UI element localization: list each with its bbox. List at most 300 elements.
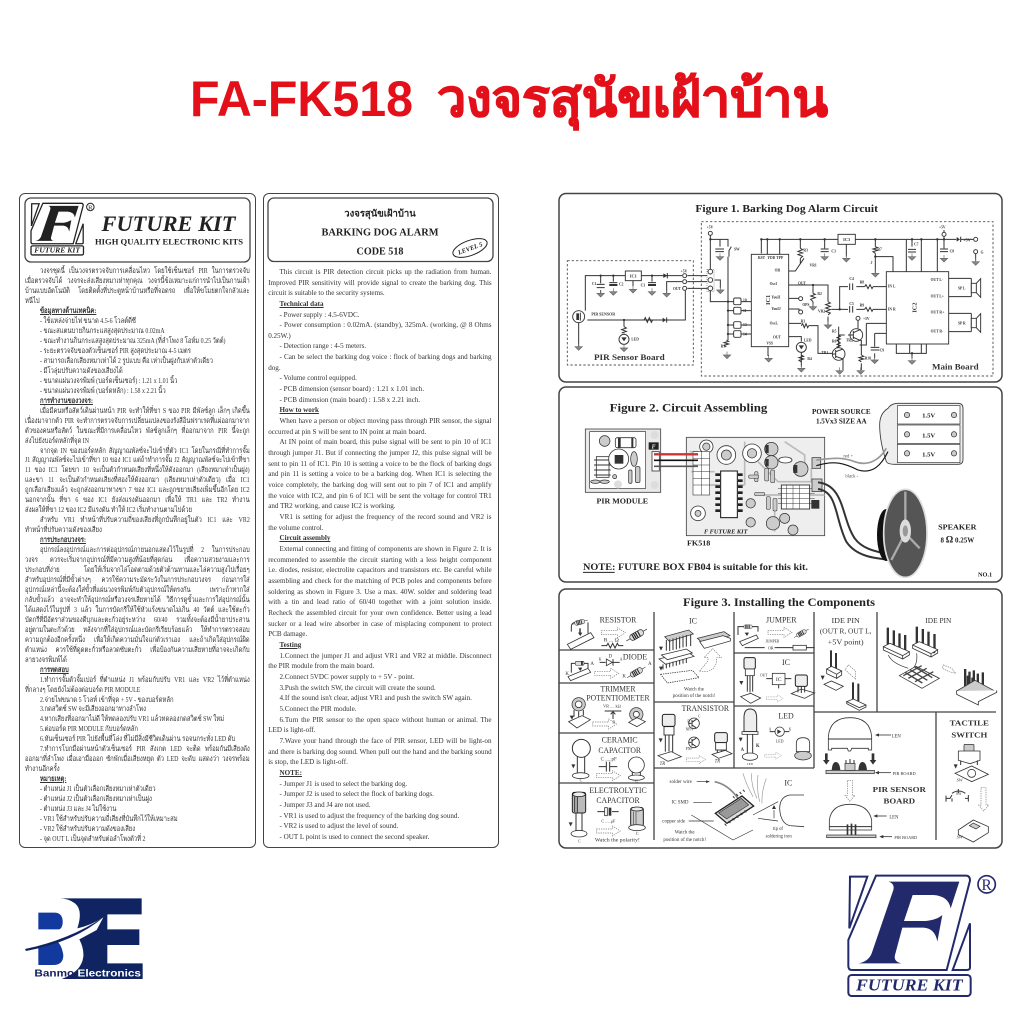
- panel: Thai instructions: ส่งผลให้ที่ขา 12 ของ IC2 มีแรงดัน ทำให้ IC2 เริ่มทำงานตามไปด้วย: [24, 505, 192, 514]
- PIR sensor board schematic: C2: [619, 283, 624, 287]
- main board schematic: R10: [865, 356, 871, 360]
- cell: PIR sensor board: BOARD: [883, 797, 916, 806]
- cell: LED: A: [769, 727, 772, 731]
- main board schematic: 14: [743, 332, 747, 336]
- panel: Thai instructions: อุปกรณ์เหล่านี้จะต้องใส่ขั้วที่แผ่นวงจรพิมพ์กับตัวอุปกรณ์ให้ตรงกัน เพราะถ้าหากใส่: [24, 585, 249, 594]
- cell: IDE PIN small: (OUT R, OUT L,: [820, 627, 872, 636]
- PIR sensor board schematic: C1: [592, 282, 597, 286]
- main board schematic: 10: [743, 299, 747, 303]
- panel: Thai instructions: ตำแหน่ง ควรใช้ที่ดูดตะกั่วหรือลวดซับตะกั่ว เพื่อป้องกันความเสียหายที่อาจจะเกิดกับ: [24, 645, 249, 654]
- heading: Figure 2: Figure 2. Circuit Assembling: [610, 401, 767, 415]
- main board schematic: C3: [831, 250, 836, 254]
- level badge: [451, 235, 489, 261]
- panel: English instructions: - Jumper J2 is used to select the flock of barking dogs.: [280, 790, 434, 798]
- cell: diode: A: [648, 662, 652, 667]
- panel: English instructions: - OUT L point is used to connect the second speaker.: [280, 833, 429, 841]
- cell: electrolytic capacitor: C: [578, 838, 581, 843]
- panel: Thai instructions: และขา 11 จะเป็นตัวกำหนดเสียงที่สองให้ดังออกมา (เสียงหมาเห่าตัวเดียว) เมื่อ IC1: [24, 475, 249, 484]
- main board schematic: R3: [801, 319, 805, 323]
- main board schematic: OUT L+: [931, 294, 944, 298]
- cell: IC SMD soldering: [662, 773, 804, 843]
- main board schematic: R5: [832, 330, 837, 334]
- panel: Thai instructions: - ระยะตรวจจับของตัวเซ็นเซอร์ PIR สูงสุดประมาณ 4-5 เมตร: [40, 346, 190, 355]
- cell: resistor: [567, 615, 649, 649]
- cell: transistor: TR: [660, 762, 665, 767]
- panel: English instructions: 1.Connect the jumper J1 and adjust VR1 and VR2 at middle. Disconnect: [280, 652, 492, 660]
- cell: LED: [739, 709, 811, 766]
- panel: English instructions: - Power supply : 4.5-6VDC.: [280, 310, 360, 318]
- PIR module board: [585, 429, 661, 492]
- main board schematic: OUT R-: [931, 330, 944, 334]
- cell: ceramic capacitor: C .....pF: [601, 758, 617, 763]
- cell: IDE PIN small: [820, 616, 872, 710]
- panel: Thai instructions: ได้แสดงไว้ในรูปที่ 3 แล้ว ในการบัดกรีให้ใช้หัวแร้งขนาดไม่เกิน 40 วัตต์ และใช้ตะกั่ว: [24, 605, 249, 614]
- main board schematic: J: [871, 261, 873, 265]
- cell: PIR sensor board: [823, 718, 927, 840]
- panel: Thai instructions: - สามารถเลือกเสียงหมาเห่าได้ 2 รูปแบบ คือ เห่าเป็นฝูงกับเห่าตัวเดียว: [40, 356, 212, 365]
- panel: English instructions: External connecting and fitting of components are shown in Figure 2. It is: [280, 545, 492, 553]
- panel: Thai instructions: การประกอบวงจร:: [40, 535, 85, 544]
- text block: English description: [268, 268, 492, 841]
- panel: English instructions: and TR2 working, and cause IC2 is working.: [268, 502, 396, 510]
- cell: electrolytic capacitor: ELECTROLYTIC: [589, 786, 647, 795]
- cell: IC regulator: IC: [776, 677, 782, 683]
- cell: ceramic capacitor: CERAMIC: [602, 736, 638, 745]
- cell: IC regulator: OUT: [760, 673, 768, 677]
- panel: Thai instructions: อยู่ตามในตะกั่วด้วย หลังจากที่ใส่อุปกรณ์และบัดกรีเรียบร้อยแล้ว ให้ทำการตรวจสอบ: [24, 625, 249, 634]
- panel: Thai instructions: 6.หันเซ็นเซอร์ PIR ไปยังพื้นที่โล่ง ที่ไม่มีสิ่งมีชีวิตเดินผ่าน รอจนกระทั่ง LED ดับ: [40, 734, 235, 743]
- cell: ceramic capacitor: C: [635, 778, 638, 783]
- panel: English instructions: PCB damage.: [268, 630, 307, 638]
- title: วงจรสุนัขเฝ้าบ้าน: [437, 70, 828, 131]
- logo mark: F letter: [858, 882, 959, 963]
- cell: IC regulator: [739, 658, 815, 703]
- speaker: [877, 489, 927, 577]
- registered mark: [978, 876, 995, 894]
- logo text: FUTURE KIT: [855, 976, 964, 995]
- main board schematic: G: [981, 250, 984, 254]
- main board schematic: VSS: [766, 341, 773, 345]
- cell: ceramic capacitor: C: [580, 778, 583, 783]
- battery holder: 1.5V: [922, 452, 935, 459]
- panel: Thai instructions: - ขนาดแผ่นวงจรพิมพ์ (บอร์ดเซ็นเซอร์) : 1.21 x 1.01 นิ้ว: [40, 376, 177, 385]
- cell: diode: A: [620, 656, 623, 661]
- cell: electrolytic capacitor: C .....μF: [601, 818, 616, 823]
- panel: English instructions: occurred at pin S will be sent to IN point at main board.: [268, 428, 426, 436]
- panel: English instructions: - PCB dimension (sensor board) : 1.21 x 1.01 inch.: [280, 385, 424, 393]
- main board schematic: OPS: [802, 303, 809, 307]
- panel: Thai instructions: ประกอบที่ง่าย โดยให้เริ่มจากไล่โอดตามด้วยตัวต้านทานและไล่ความสูงไปเรื่อยๆ: [24, 565, 249, 574]
- cell: transistor: B: [687, 719, 690, 723]
- cell: diode: D: [609, 655, 613, 660]
- panel: Thai instructions: - VR2 ใช้สำหรับปรับความดังของเสียง: [40, 824, 135, 833]
- cell: electrolytic capacitor: C: [636, 831, 639, 836]
- panel: Thai instructions: - ตำแหน่ง J2 เป็นตัวเลือกเสียงหมาเห่าเป็นฝูง: [40, 794, 151, 803]
- panel: English instructions: through jumper J1. But if connecting the jumper J2, this pulse signal will be: [268, 449, 492, 457]
- battery holder: 1.5V: [922, 413, 935, 420]
- cell: IC SMD soldering: solder wire: [670, 780, 693, 785]
- panel: Thai instructions: 7.ทำการโบกมือผ่านหน้าตัวเซ็นเซอร์ PIR สังเกต LED จะติด พร้อมกันมีเสียงดัง: [40, 744, 249, 753]
- main board schematic: R7: [877, 248, 882, 252]
- cell: trimmer potentiometer: VR .... kΩ: [603, 704, 621, 709]
- panel: Thai instructions: วงจรชุดนี้ เป็นวงจรตรวจจับการเคลื่อนไหว โดยใช้เซ็นเซอร์ PIR ในการตรวจจับ: [40, 266, 249, 275]
- main board schematic: +5V: [963, 238, 972, 243]
- cell: IC SMD soldering: soldering iron: [766, 834, 792, 839]
- cell: IDE PIN small: +5V point): [828, 637, 864, 646]
- cell: jumper: JUMPER: [766, 615, 797, 624]
- label: power source: 1.5Vx3 SIZE AA: [816, 417, 867, 425]
- main board schematic: C4: [849, 277, 854, 281]
- panel: Thai instructions: สำหรับ VR1 ทำหน้าที่ปรับความถี่ของเสียงที่ถูกบันทึกอยู่ในตัว IC1 และ VR2: [40, 515, 249, 524]
- cell: LED: LED: [776, 738, 784, 743]
- panel: Thai instructions: ความถูกต้องอีกครั้งหนึ่ง เพื่อให้เกิดความมั่นใจแก่ตัวเราเอง และถ้าเกิดใส่อุปกรณ์ผิด: [24, 635, 249, 644]
- cell: IC SMD soldering: copper side: [662, 819, 686, 824]
- main PCB: [686, 437, 825, 536]
- main board schematic: 13: [743, 323, 747, 327]
- panel: English instructions: 7.Wave your hand through the face of PIR sensor, LED will be light-on: [280, 737, 492, 745]
- panel: English instructions: - Power consumption : 0.02mA. (standby), 325mA. (working, @ 8 Ohms: [280, 321, 492, 329]
- cell: tactile switch: SW: [956, 792, 962, 796]
- panel: English instructions: Improved PIR sensitivity will provide signal to create the barking dog. This: [268, 278, 492, 286]
- logo mark: swoosh: [25, 917, 103, 951]
- panel: Figure 2: [559, 387, 1002, 582]
- panel: Thai instructions: - ขณะทำงานกินกระแสสูงสุดประมาณ 325mA (ที่ลำโพง 8 โอห์ม 0.25 วัตต์): [40, 336, 225, 345]
- main board schematic: LED: [804, 339, 812, 343]
- PIR sensor board schematic: [567, 261, 707, 365]
- main board schematic: IC2: [911, 302, 918, 313]
- main board schematic: RST: [758, 256, 766, 260]
- cell: IC SMD soldering: IC: [784, 779, 792, 788]
- panel: English instructions: VR1 is setting for adjust the frequency of the record sound and VR2 is: [280, 513, 492, 521]
- panel: Thai instructions: 3.กดสวิตช์ SW จะมีเสียงออกมาทางลำโพง: [40, 704, 145, 713]
- cell: IDE PIN small: IDE PIN: [831, 616, 861, 625]
- cell: LED: LED: [747, 762, 754, 766]
- panel: English instructions: - VR2 is used to adjust the level of sound.: [280, 822, 398, 830]
- panel: Thai instructions: - ขนาดแผ่นวงจรพิมพ์ (บอร์ดหลัก) : 1.58 x 2.21 นิ้ว: [40, 386, 165, 395]
- cell: transistor: TR: [715, 759, 720, 764]
- cell: electrolytic capacitor: Watch the polarity!: [595, 838, 640, 844]
- cell: transistor: NPN: [686, 727, 693, 731]
- main board schematic: OUT L-: [931, 278, 944, 282]
- level badge: LEVEL 5: [456, 241, 484, 257]
- cell: ceramic capacitor: CAPACITOR: [598, 746, 642, 755]
- label: speaker: SPEAKER: [938, 523, 978, 531]
- cell: IC: [659, 616, 730, 699]
- label: FK518: FK518: [687, 540, 711, 548]
- wires: battery: [816, 448, 888, 480]
- panel: English instructions: Testing: [280, 641, 301, 649]
- panel: Thai instructions: [19, 193, 256, 848]
- icon: small Future Kit logo: [31, 203, 94, 255]
- panel: English instructions: soldering as shown in Figure 3. Use a max. 40W. solder and soldering lead: [268, 588, 492, 596]
- panel: Thai instructions: อุปกรณ์ลงอุปกรณ์และการต่ออุปกรณ์ภายนอกแสดงไว้ในรูปที่ 2 ในการประกอบ: [40, 545, 249, 554]
- panel: English instructions: 5.Connect the PIR module.: [280, 705, 357, 713]
- cell: LED: K: [756, 744, 760, 749]
- main board schematic: C5: [849, 302, 854, 306]
- logo mark: E letter: [60, 898, 143, 979]
- cell: IC SMD soldering: tip of: [773, 827, 783, 832]
- panel: English instructions: LED is light-off.: [268, 726, 316, 734]
- panel: English instructions: - Jumper J3 and J4 are not used.: [280, 801, 371, 809]
- cell: electrolytic capacitor: CAPACITOR: [596, 796, 640, 805]
- title: FA-FK518: [190, 71, 413, 127]
- cell: resistor: RESISTOR: [600, 615, 637, 624]
- panel: Thai instructions: เมื่อมีคนหรือสัตว์เดินผ่านหน้า PIR จะทำให้ที่ขา S ของ PIR มีพัลซ์ลูก เล็กๆ เกิดขึ้น: [40, 406, 249, 415]
- main board schematic: +5V: [863, 317, 870, 321]
- panel: Thai instructions: 4.หากเสียงที่ออกมาไม่ดี ให้ทดลองปรับ VR1 แล้วทดลองกดสวิตช์ SW ใหม่: [40, 714, 224, 723]
- wires: PIR to main: [654, 454, 698, 466]
- main board schematic: SW: [734, 248, 740, 252]
- main board schematic: C7: [914, 242, 919, 246]
- cell: transistor: TRANSISTOR: [682, 704, 730, 713]
- panel: English instructions: the voice with IC2, and pin 6 of IC1 will be sent the voltage for control TR1: [268, 492, 492, 500]
- main board schematic: C9: [880, 348, 884, 352]
- icon: small Future Kit logo: FUTURE KIT: [34, 247, 81, 255]
- product code: CODE 518: [356, 246, 404, 258]
- wires: battery: red +: [843, 455, 853, 460]
- main board schematic: +5V: [707, 226, 714, 230]
- panel: English instructions: dog.: [268, 364, 281, 372]
- label: Main Board: Main Board: [932, 362, 979, 371]
- product name: BARKING DOG ALARM: [322, 228, 439, 238]
- label: NO.1: NO.1: [978, 571, 992, 578]
- panel: Figure 1: [559, 194, 1002, 382]
- cell: PIR sensor board: PIR BOARD: [894, 835, 917, 840]
- main board schematic: R9: [860, 304, 864, 308]
- main board schematic: R2: [817, 292, 822, 296]
- panel: Thai instructions: - จุด OUT L เป็นจุดสำหรับต่อลำโพงตัวที่ 2: [40, 834, 145, 843]
- panel: English instructions: and pin 11 is setting a voice to be a barking dog. When IC1 is selecting the: [268, 470, 492, 478]
- panel: Thai instructions: - ขณะสแตนบายกินกระแสสูงสุดประมาณ 0.02mA: [40, 326, 164, 335]
- main board schematic: SP L: [958, 286, 966, 290]
- cell: IDE PIN large: [883, 616, 997, 705]
- panel: English instructions: 3.Push the switch SW, the circuit will create the sound.: [280, 684, 436, 692]
- logo mark: B letter: [38, 913, 63, 965]
- cell: jumper: JUMPER: [765, 639, 780, 643]
- panel: English instructions: When have a person or object moving pass through PIR sensor, the signal: [280, 417, 492, 425]
- thai product name: วงจรสุนัขเฝ้าบ้าน: [344, 208, 416, 220]
- title: [190, 70, 828, 131]
- label: power source: [812, 408, 871, 425]
- header box: Barking Dog Alarm: [268, 198, 493, 262]
- panel: English instructions: - Jumper J1 is used to select the barking dog.: [280, 780, 407, 788]
- registered mark: R: [982, 877, 993, 894]
- main board schematic: IC1: [765, 295, 772, 305]
- panel: English instructions: the volume control.: [268, 524, 324, 532]
- heading: Figure 3: Figure 3. Installing the Components: [683, 595, 875, 609]
- panel: English instructions: 4.If the sound isn't clear, adjust VR1 and push the switch SW again.: [280, 694, 472, 702]
- cell: transistor: [658, 704, 732, 767]
- battery holder: 1.5V: [922, 432, 935, 439]
- panel: English instructions: - VR1 is used to adjust the frequency of the barking dog sound.: [280, 812, 459, 820]
- label: PIR Sensor Board: PIR Sensor Board: [594, 353, 665, 362]
- cell: IC SMD soldering: position of the notch!: [663, 838, 706, 843]
- panel: Thai instructions: ลายวงจรพิมพ์ได้: [24, 655, 66, 664]
- panel: English instructions: - Can be select the barking dog voice : flock of barking dogs and barking: [280, 353, 492, 361]
- panel: English instructions: - Volume control equipped.: [280, 374, 357, 382]
- cell: tactile switch: SW: [957, 834, 963, 839]
- cell: tactile switch: SWITCH: [951, 730, 987, 739]
- cell: trimmer potentiometer: TRIMMER: [600, 685, 636, 694]
- panel: Thai instructions: - VR1 ใช้สำหรับปรับความถี่เสียงที่บันทึกไว้ให้เหมาะสม: [40, 814, 177, 823]
- brand name: FUTURE KIT: [101, 211, 237, 236]
- cell: jumper: OR: [768, 645, 774, 650]
- cell: LED: LED: [778, 711, 794, 720]
- label: speaker: [938, 523, 978, 546]
- cell: diode: K: [565, 672, 569, 677]
- panel: English instructions: recommended to assemble the circuit starting with a less height component: [268, 556, 492, 564]
- panel: Thai instructions: นอกจากนั้น ที่ขา 6 ของ IC1 ยังส่งแรงดันออกมา เพื่อให้ TR1 และ TR2 ทำงาน: [24, 495, 249, 504]
- main board schematic: TPP: [776, 256, 784, 260]
- main board schematic: OUT R+: [931, 311, 944, 315]
- panel: English instructions: [263, 193, 499, 848]
- panel: Thai instructions: บ้านแบบอัตโนมัติ โดยติดตั้งที่ประตูหน้าบ้านหรือที่จอดรถ เพื่อให้ขโมยตกใจกลัวและ: [24, 286, 249, 295]
- main board schematic: OR: [775, 268, 781, 272]
- PIR sensor board schematic: OUT: [673, 287, 681, 291]
- main board schematic: OUT: [773, 336, 781, 340]
- panel: Thai instructions: ทำงานอีกครั้ง: [24, 764, 59, 773]
- panel: Thai instructions: วงจร ควรจะเริ่มจากอุปกรณ์ที่มีความสูงที่น้อยที่สุดก่อน เพื่อความสวยงามและการ: [24, 555, 249, 564]
- PIR module board: F: [652, 444, 656, 450]
- cell: PIR sensor board: LEN: [889, 815, 899, 820]
- panel: Thai instructions: ถูกเลือกเสียงแล้ว จะถูกส่งออกมาทางขา 7 ของ IC1 และถูกขยายเสียงเพิ่มขึ้นอีกโดย IC2: [24, 485, 249, 494]
- main board schematic: OscI: [770, 282, 778, 286]
- main board schematic: [599, 222, 993, 376]
- main board schematic: TR2: [846, 339, 853, 343]
- panel: Thai instructions: การทำงานของวงจร:: [40, 396, 92, 405]
- main board schematic: TR1: [821, 351, 828, 355]
- cell: trimmer potentiometer: [569, 685, 650, 729]
- panel: Thai instructions: ออกมาที่ลำโพง เมื่อเอามือออก ซักพักเมื่อเสียงหยุด ตัว LED จะดับ แสดงว่า วงจรพร้อม: [24, 754, 249, 763]
- main board schematic: R4: [807, 357, 812, 361]
- cell: diode: DIODE: [623, 653, 647, 662]
- main board schematic: SP R: [958, 321, 966, 325]
- text block: Thai description: [24, 265, 250, 843]
- cell: diode: [565, 653, 652, 681]
- panel: Thai instructions: ที่กลางๆ โดยยังไม่ต้องต่อบอร์ด PIR MODULE: [24, 684, 140, 694]
- panel: Thai instructions: J1 สัญญาณพัลซ์จะไปเข้าที่ขา 10 ของ IC1 แต่ถ้าทำการจั๊ม J2 สัญญาณพัลซ์จะไปเข้าที่ขา: [24, 455, 249, 464]
- panel: Thai instructions: เนื่องมาจากตัว PIR จะทำการตรวจจับการเปลี่ยนแปลงของรังสีอินฟราเรดที่แผ่ออกมาจาก: [24, 416, 249, 425]
- main board schematic: OUT: [798, 281, 806, 285]
- cell: IC: Watch the: [684, 688, 705, 693]
- cell: PIR sensor board: PIR BOARD: [893, 771, 916, 776]
- cell: trimmer potentiometer: B: [612, 719, 615, 724]
- header box: Future Kit logo and brand: [25, 198, 250, 262]
- cell: PIR sensor board: PIR SENSOR: [873, 785, 927, 794]
- cell: diode: K: [622, 675, 626, 680]
- panel: Thai instructions: ข้อมูลทางด้านเทคนิค:: [40, 306, 96, 315]
- cell: jumper: [738, 615, 815, 650]
- PIR sensor board schematic: LED: [631, 338, 639, 342]
- main board schematic: R3: [803, 248, 808, 252]
- panel: English instructions: and there is barking dog sound. When pull out the hand and the barking sound: [268, 748, 492, 756]
- logo: Future Kit: [848, 876, 995, 996]
- panel: Thai instructions: สำหรับอุปกรณ์ที่มีขั้วต่างๆ ควรใช้ความระมัดระวังในการประกอบวงจร ก่อนการใส่: [24, 575, 249, 584]
- cell: diode: A: [590, 662, 594, 667]
- panel: Thai instructions: เมื่อตรวจจับได้ วงจรจะส่งเสียงหมาเห่าทุกคุณ วงจรนี้ข้อเหมาะแก่การนำไปเป็นกานเฝ้า: [24, 276, 249, 285]
- icon: small Future Kit logo: R: [88, 204, 93, 211]
- panel: English instructions: with a tin and lead ratio of 60/40 together with a joint solution inside.: [268, 598, 492, 606]
- panel: Thai instructions: จากจุด IN ของบอร์ดหลัก สัญญาณพัลซ์จะไปเข้าที่ตัว IC1 โดยในกรณีที่ทำการจั๊ม: [40, 446, 249, 454]
- panel: Thai instructions: กลับขั้วแล้ว อาจจะทำให้อุปกรณ์หรือวงจรเสียหายได้ วิธีการดูขั้วและการใส่อุปกรณ์นั้น: [24, 595, 249, 604]
- panel: Thai instructions: 11 ของ IC1 โดยขา 10 จะเป็นตัวกำหนดเสียงที่หนึ่งให้ดังออกมา (เสียงหมาเห่าเป็นฝูง): [24, 465, 249, 474]
- main board schematic: IN L: [888, 285, 896, 289]
- panel: Thai instructions: 2.จ่ายไฟขนาด 5 โวลท์ เข้าที่จุด + 5V - ของบอร์ดหลัก: [40, 694, 173, 704]
- cell: LED: A: [741, 748, 745, 753]
- cell: IC SMD soldering: Watch the: [675, 830, 695, 835]
- panel: Thai instructions: ตัวของคนหรือสัตว์ ในขณะที่มีการเคลื่อนไหว พัลซ์ลูกเล็กๆ ที่ออกมาจาก PIR นี้จะถูก: [24, 426, 249, 435]
- main board schematic: YDD: [767, 256, 776, 260]
- note: NOTE: FUTURE BOX FB04 is suitable for this kit.: [583, 563, 808, 573]
- label: PIR module: PIR MODULE: [596, 497, 649, 505]
- panel: English instructions: circuit is suitable to the security systems.: [268, 289, 385, 297]
- main board schematic: 11: [743, 309, 747, 313]
- PIR sensor board schematic: IC1: [630, 274, 637, 279]
- panel: Thai instructions: - ตำแหน่ง J3 และ J4 ไม่ใช้งาน: [40, 804, 116, 813]
- brand tagline: HIGH QUALITY ELECTRONIC KITS: [95, 236, 243, 246]
- panel: English instructions: assembling and check for the matching of PCB poles and components before: [268, 577, 492, 585]
- panel: English instructions: - PCB dimension (main board) : 1.58 x 2.21 inch.: [280, 396, 420, 404]
- panel: English instructions: sent to pin 11 of IC1. Pin 10 is setting a voice to be the flock of barking dogs: [268, 460, 492, 468]
- panel: Thai instructions: - มีโวลุ่มปรับความดังของเสียงได้: [40, 366, 122, 375]
- panel: Thai instructions: ส่งไปยังบอร์ดหลักที่จุด IN: [24, 436, 89, 444]
- cell: trimmer potentiometer: POTENTIOMETER: [586, 693, 650, 702]
- panel: English instructions: i.e. diodes, resistor, electrolite capacitors and transistors etc. Be careful while: [268, 566, 492, 574]
- panel: English instructions: sucker or a lead wire absorber in case of misplacing component to protect: [268, 620, 492, 628]
- main board schematic: VR2: [818, 310, 825, 314]
- panel: English instructions: voice completely, the barking dog will sent out to pin 7 of IC1 and amplify: [268, 481, 492, 489]
- main PCB: F FUTURE KIT: [704, 529, 749, 536]
- panel: English instructions: is stop, the LED is light-off.: [268, 758, 348, 766]
- battery holder: [880, 403, 963, 464]
- panel: Thai instructions: - ใช้แหล่งจ่ายไฟ ขนาด 4.5-6 โวลต์ดีซี: [40, 316, 135, 325]
- label: speaker: 8 Ω 0.25W: [940, 536, 974, 546]
- main board schematic: VR1: [810, 264, 817, 268]
- cell: IC: position of the notch!: [673, 694, 716, 699]
- cell: transistor: C: [698, 715, 701, 719]
- panel: Thai instructions: 5.ต่อบอร์ด PIR MODULE กับบอร์ดหลัก: [40, 724, 137, 733]
- cell: IC regulator: IC: [782, 658, 790, 667]
- label: power source: POWER SOURCE: [812, 408, 871, 416]
- cell: resistor: R ... Ω: [604, 638, 619, 644]
- cell: transistor: PNP: [686, 747, 692, 751]
- panel: Thai instructions: 1.ทำการจั๊มตัวจั๊มเปอร์ ที่ตำแหน่ง J1 พร้อมกับปรับ VR1 และ VR2 ไว้ที่ตำแหน่ง: [40, 675, 249, 684]
- panel: English instructions: Recheck the assembled circuit for your own confidence. Better using a lead: [268, 609, 492, 617]
- PIR sensor board schematic: +5V: [681, 269, 688, 273]
- cell: diode: K: [599, 656, 602, 661]
- main board schematic: R1: [721, 344, 725, 348]
- panel: English instructions: 2.Connect 5VDC power supply to + 5V - point.: [280, 673, 415, 681]
- cell: ceramic capacitor: [571, 736, 644, 783]
- panel: English instructions: 0.25W.): [268, 332, 291, 340]
- panel: Thai instructions: หนีไป: [24, 296, 39, 305]
- PIR sensor board schematic: C3: [641, 284, 645, 288]
- main board schematic: +5V: [939, 226, 946, 230]
- main board schematic: C8: [950, 250, 954, 254]
- panel: English instructions: Technical data: [280, 300, 324, 308]
- cell: tactile switch: SW: [957, 778, 963, 783]
- panel: English instructions: the PIR module from the main board.: [268, 662, 374, 670]
- cell: electrolytic capacitor: [569, 786, 647, 844]
- cell: IDE PIN large: IDE PIN: [925, 616, 952, 625]
- main board schematic: OscL: [770, 322, 779, 326]
- main board schematic: IN R: [888, 308, 896, 312]
- main board schematic: R8: [860, 280, 864, 284]
- panel: Thai instructions: หมายเหตุ:: [40, 774, 66, 783]
- wires: battery: black -: [845, 475, 859, 480]
- panel: English instructions: This circuit is PIR detection circuit picks up the radiation from human.: [280, 268, 492, 276]
- panel: Thai instructions: การทดสอบ: [40, 665, 68, 674]
